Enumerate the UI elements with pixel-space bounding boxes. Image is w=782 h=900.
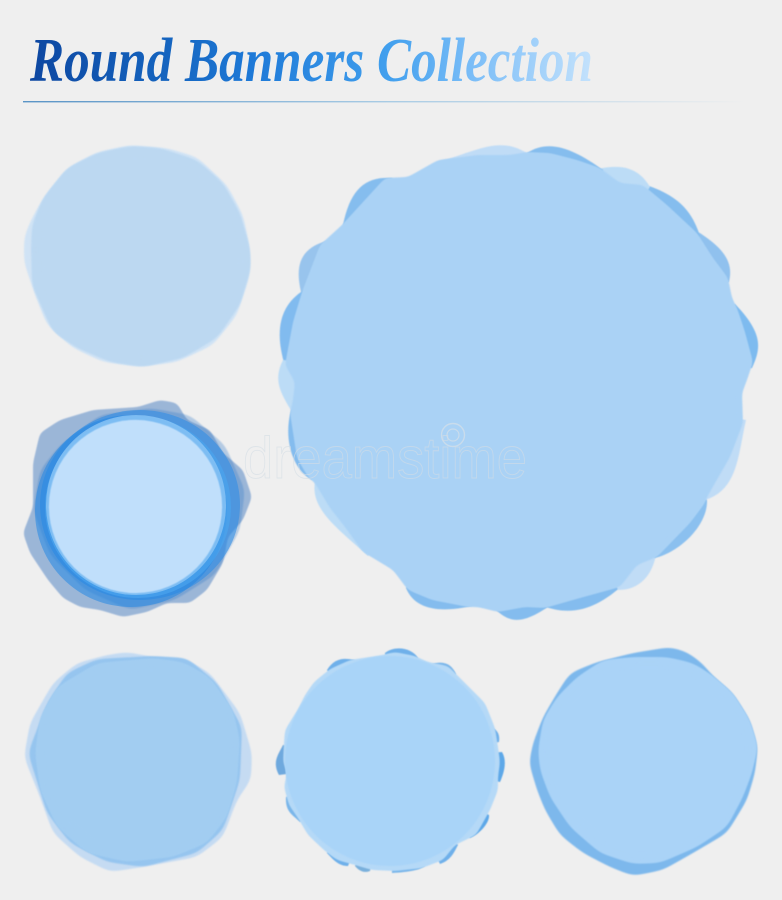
watermark: dreamstime: dreamstime	[243, 426, 527, 491]
banner: wavy outline bottom-right	[529, 647, 758, 876]
banner: large scalloped right	[278, 145, 758, 620]
title: Round Banners Collection	[29, 27, 593, 95]
banner: scalloped bottom-middle	[276, 648, 505, 873]
title rule	[23, 101, 745, 102]
banner: soft blue bottom-left	[24, 652, 252, 872]
banner: ring banner left middle	[23, 400, 252, 617]
banner: pale plain top-left	[24, 145, 251, 367]
